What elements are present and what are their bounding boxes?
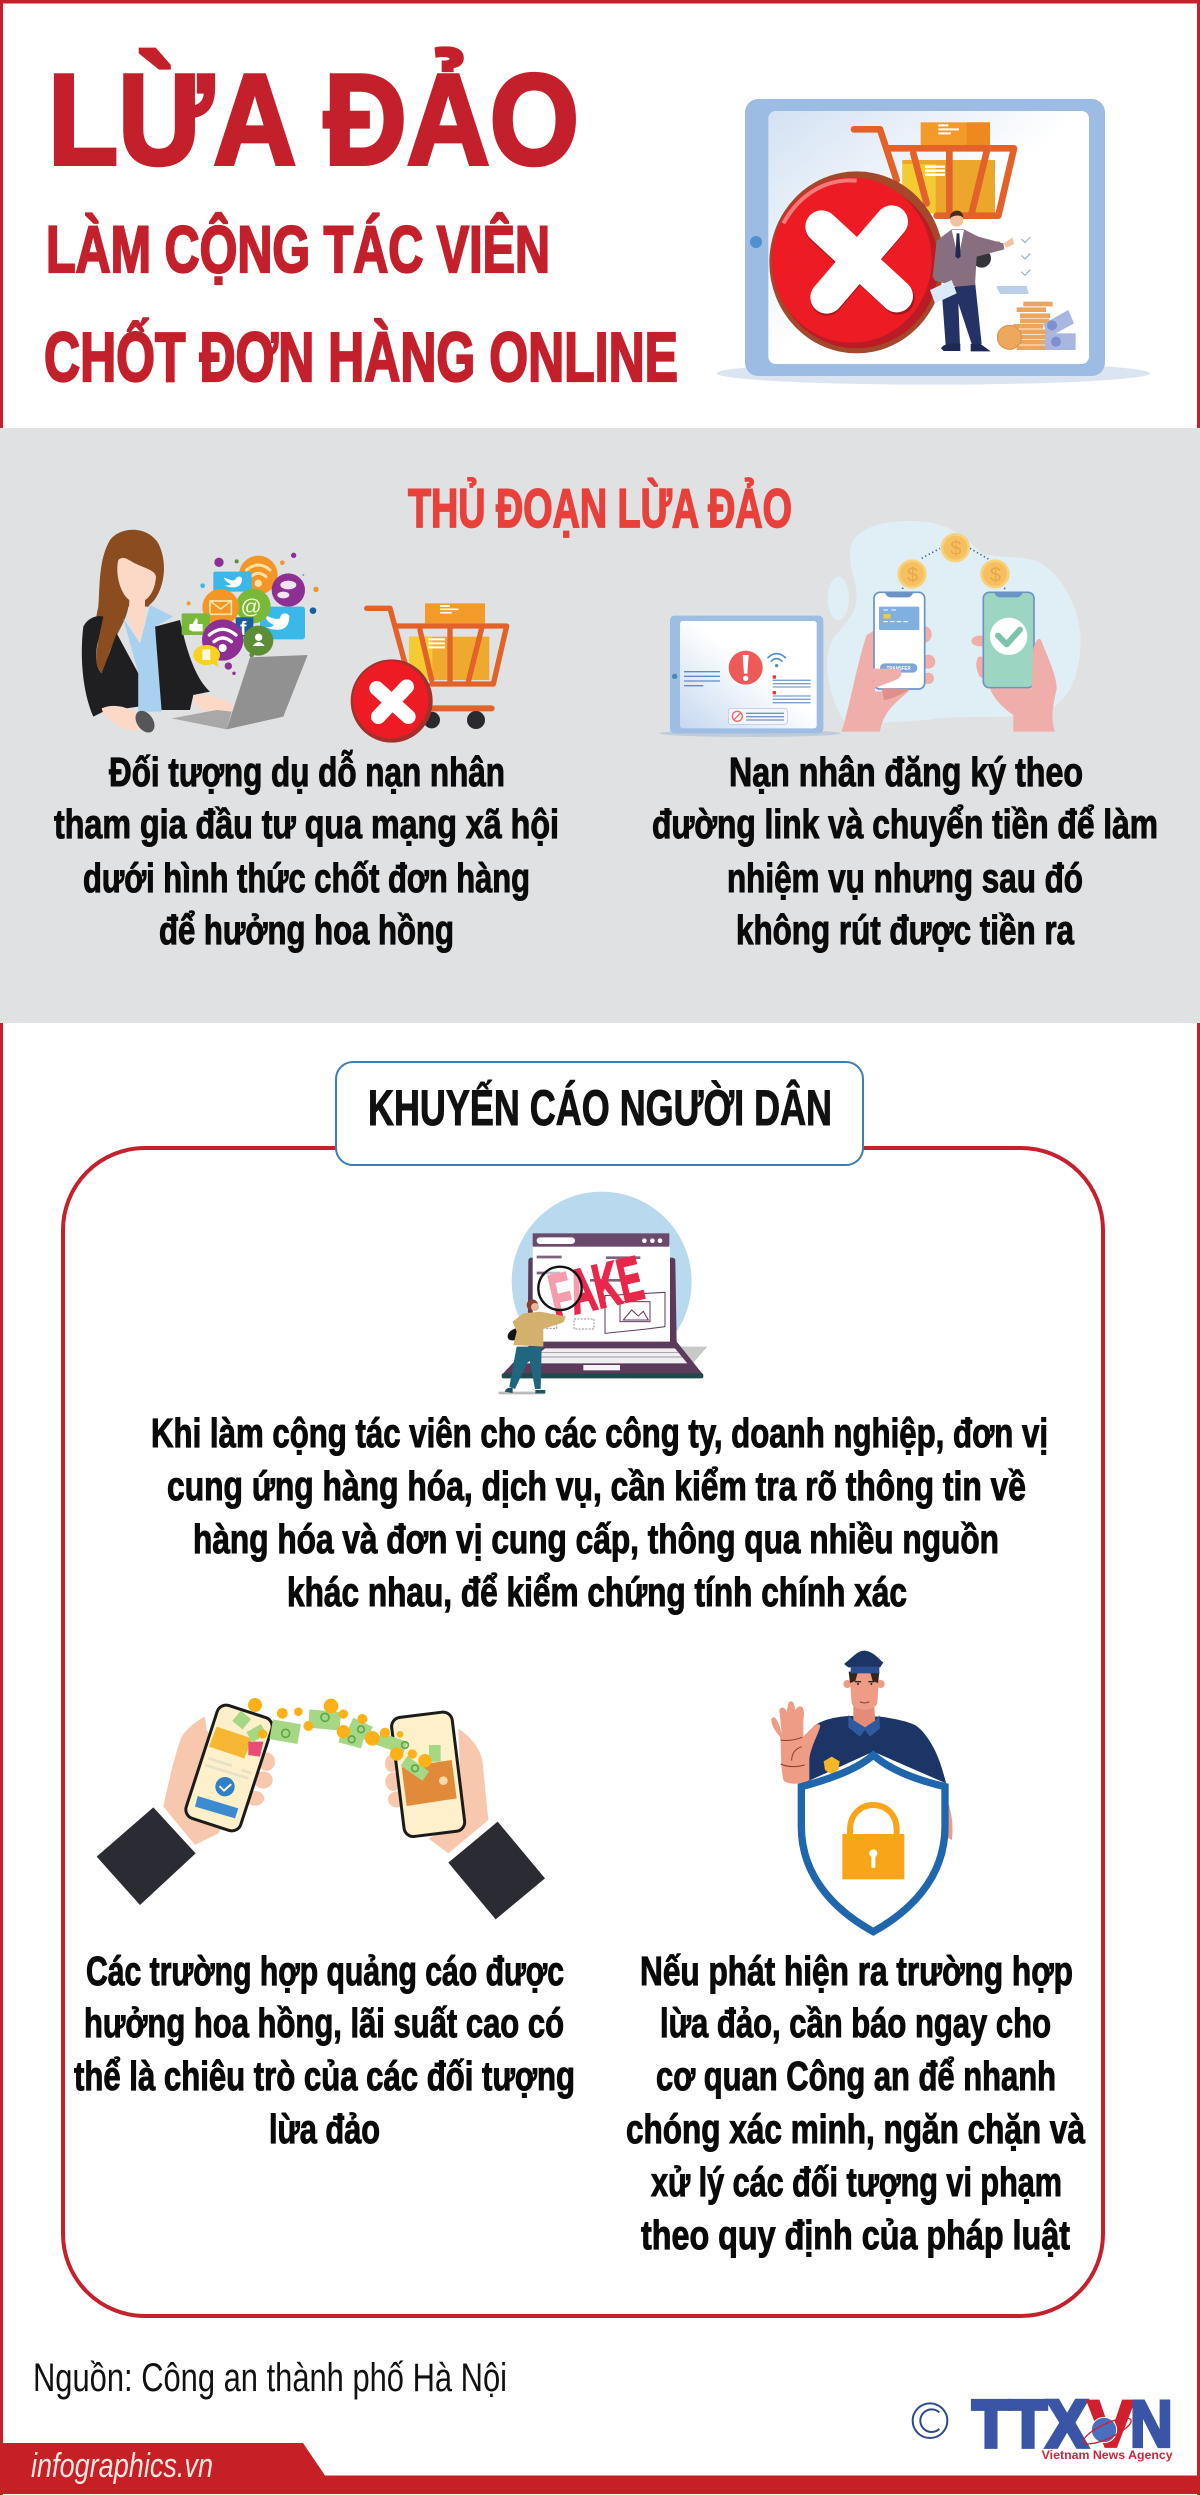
title line 1: LỪA ĐẢO — [48, 47, 579, 192]
text block: recommendation 3 — [626, 1948, 1085, 2258]
text block: tactic 1: Đối tượng dụ dỗ nạn nhân — [109, 749, 505, 795]
footer bar — [0, 2443, 1200, 2494]
logo: TTXVN: N — [1130, 2387, 1173, 2461]
text block: recommendation 3: xử lý các đối tượng vi phạm — [651, 2159, 1062, 2205]
text block: tactic 2: Nạn nhân đăng ký theo — [729, 749, 1083, 795]
logo: TTXVN — [913, 2387, 1173, 2462]
source line: Nguồn: Công an thành phố Hà Nội — [33, 2356, 507, 2400]
text block: recommendation 2: lừa đảo — [269, 2106, 380, 2152]
icon: phones transferring money and warning tablet: $ — [907, 564, 918, 586]
text block: recommendation 2 — [74, 1948, 575, 2152]
panel: recommendations — [63, 1062, 1103, 2316]
text block: recommendation 3: Nếu phát hiện ra trường hợp — [640, 1948, 1073, 1994]
text block: recommendation 3: lừa đảo, cần báo ngay cho — [660, 2000, 1051, 2046]
icon: woman at laptop with social media icons and cart: f — [240, 619, 247, 640]
icon: phones transferring money and warning tablet: $ — [990, 564, 1001, 586]
text block: recommendation 2: thể là chiêu trò của các đối tượng — [74, 2053, 575, 2099]
text block: tactic 1: để hưởng hoa hồng — [159, 907, 454, 953]
icon: phones transferring money and warning tablet: $ — [950, 538, 961, 560]
text block: recommendation 3: theo quy định của pháp luật — [641, 2212, 1070, 2258]
icon: hands with phones and money transfer — [97, 1698, 545, 1919]
logo: TTXVN: TTX — [972, 2387, 1087, 2461]
icon: phones transferring money and warning tablet — [659, 521, 1081, 737]
heading box: recommendations — [336, 1062, 863, 1165]
icon: woman at laptop with social media icons and cart: @ — [241, 595, 262, 618]
text block: recommendation 3: cơ quan Công an để nhanh — [656, 2053, 1056, 2099]
header title — [44, 47, 678, 396]
text block: tactic 2: không rút được tiền ra — [736, 907, 1075, 953]
text block: tactic 1 — [54, 749, 559, 953]
heading box: recommendations: KHUYẾN CÁO NGƯỜI DÂN — [368, 1080, 832, 1136]
text block: recommendation 2: hưởng hoa hồng, lãi suất cao có — [84, 2000, 564, 2046]
logo: TTXVN: Vietnam News Agency — [1042, 2448, 1173, 2462]
footer bar: infographics.vn — [31, 2447, 213, 2485]
text block: tactic 2: nhiệm vụ nhưng sau đó — [727, 855, 1083, 901]
icon: police officer with shield and lock — [771, 1651, 953, 1932]
icon: fake website on laptop with magnifier — [498, 1192, 707, 1394]
icon: phones transferring money and warning tablet: TRANSFER — [887, 666, 911, 672]
title line 2: LÀM CỘNG TÁC VIÊN — [46, 212, 550, 286]
text block: tactic 1: tham gia đầu tư qua mạng xã hội — [54, 801, 559, 847]
text block: recommendation 1: khác nhau, để kiểm chứng tính chính xác — [287, 1569, 907, 1615]
panel: fraud tactics — [0, 428, 1200, 1023]
heading: tactics: THỦ ĐOẠN LỪA ĐẢO — [408, 477, 792, 539]
icon: fake website on laptop with magnifier: FAKE — [543, 1244, 649, 1332]
text block: tactic 1: dưới hình thức chốt đơn hàng — [83, 855, 530, 901]
icon: tablet with shopping cart, red X and businessman — [717, 99, 1150, 385]
title line 3: CHỐT ĐƠN HÀNG ONLINE — [44, 317, 678, 396]
icon: woman at laptop with social media icons and cart — [82, 530, 507, 743]
logo: TTXVN: V — [1087, 2387, 1134, 2461]
text block: recommendation 1 — [151, 1410, 1048, 1615]
text block: recommendation 2: Các trường hợp quảng cáo được — [86, 1948, 564, 1994]
text block: tactic 2 — [652, 749, 1158, 953]
